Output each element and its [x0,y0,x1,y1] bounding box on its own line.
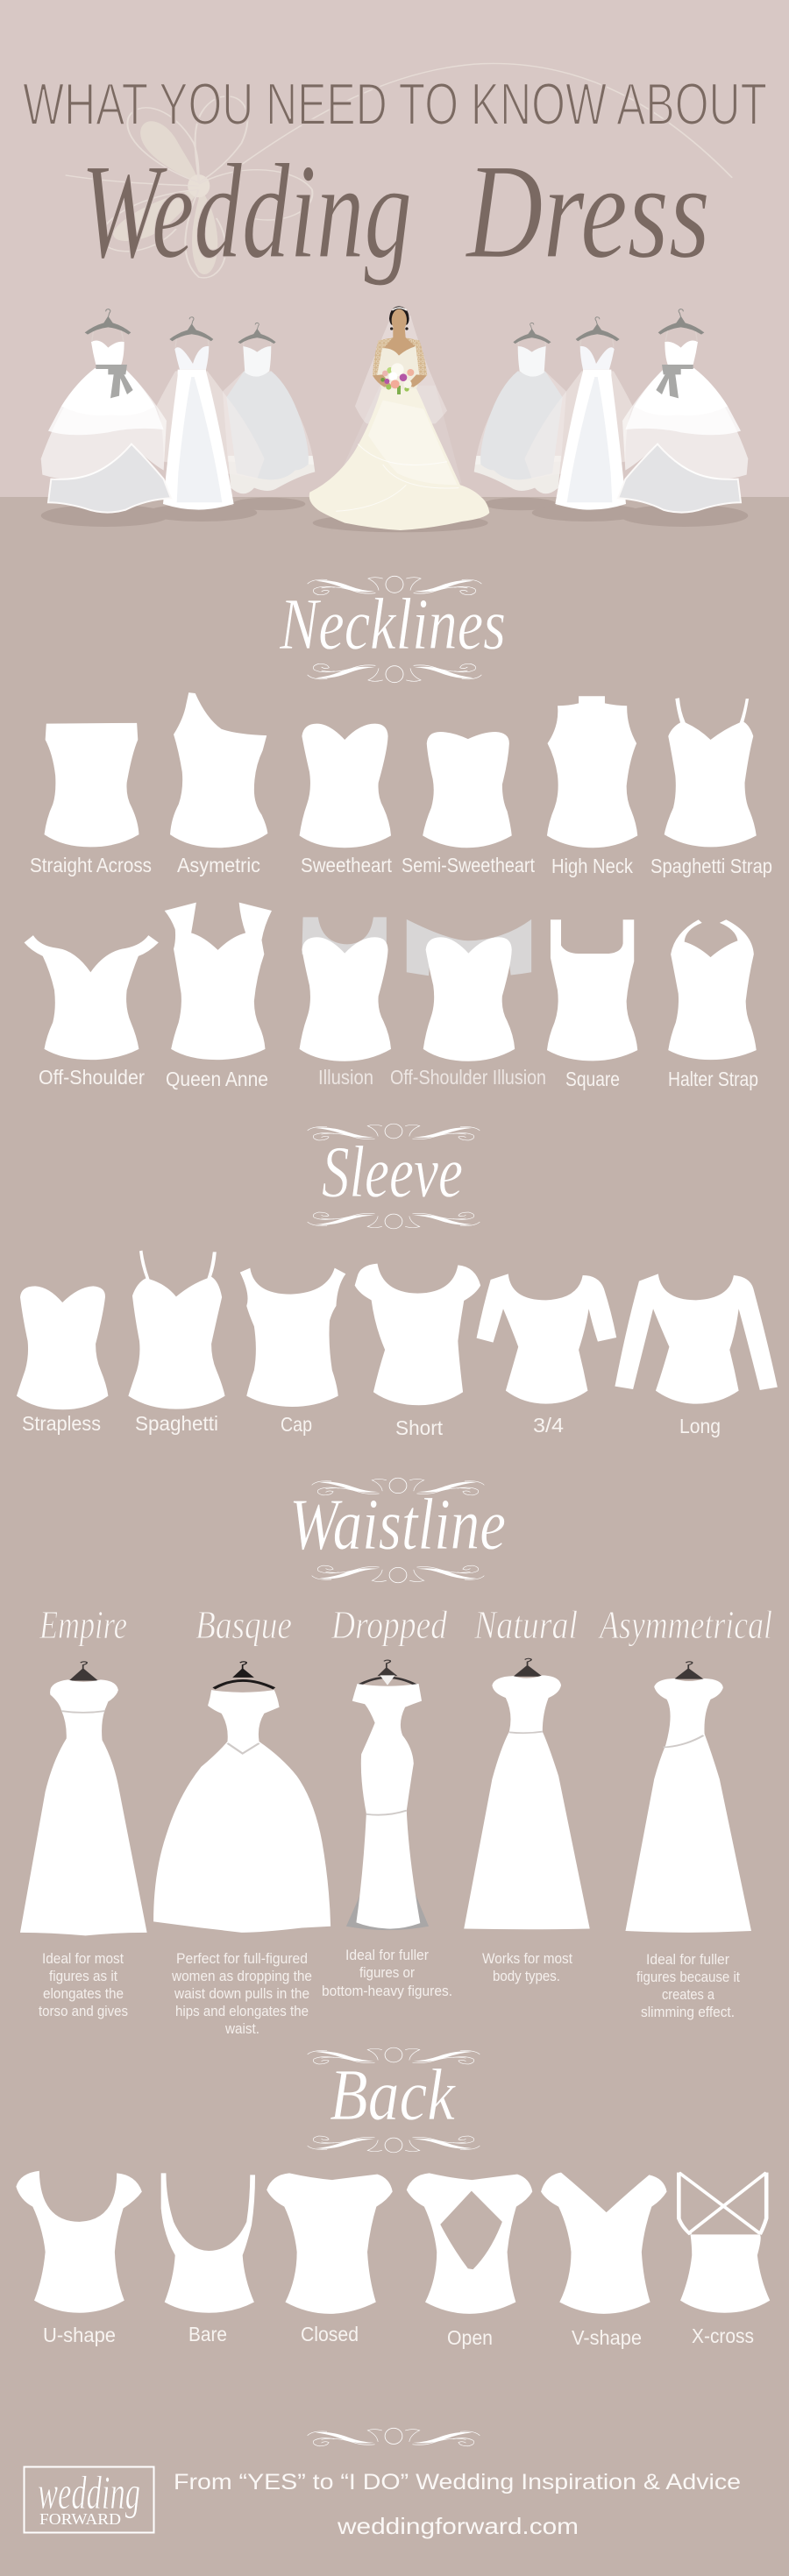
dress: asymmetrical [625,1662,751,1933]
ornament [312,1565,484,1583]
waistline sub-headings: Dropped [331,1602,448,1647]
back labels: V-shape [572,2326,642,2349]
garment: long [615,1274,778,1404]
neckline labels: Off-Shoulder Illusion [390,1066,546,1089]
sleeve labels: Strapless [22,1412,101,1435]
garment: closed [267,2173,393,2314]
forearms [373,374,427,387]
dresses on hangers, right [474,309,748,527]
sleeve labels: 3/4 [533,1414,564,1437]
garment: off-shoulder illusion [407,919,531,1061]
neckline labels: Sweetheart [301,854,393,876]
logo: wedding forward: FORWARD [39,2510,121,2528]
heading: Waistline: Waistline [289,1484,506,1565]
neckline labels: Halter Strap [668,1068,758,1090]
title: Wedding Dress: Dress [465,136,710,287]
neckline labels: Square [565,1068,620,1090]
back labels: U-shape [43,2324,116,2346]
text block: natural: Works for most [482,1950,572,1967]
panel: waistline [20,1478,772,2037]
bodice [377,346,419,388]
text block: dropped: bottom-heavy figures. [322,1983,452,1999]
logo: wedding forward: wedding [38,2466,140,2519]
text block: empire: Ideal for most [42,1950,124,1967]
neckline labels: High Neck [551,855,633,877]
garment: spaghetti strap [665,698,757,847]
dress: middle [156,336,265,510]
dress: front with bow [41,330,171,513]
sleeve labels: Long [679,1415,721,1437]
neckline labels: Asymetric [177,854,260,876]
garment: off-shoulder [25,935,159,1060]
head and hair [389,306,409,331]
dress: empire [20,1662,147,1935]
garment: three quarter [477,1274,616,1404]
ornament [308,664,481,683]
lace sleeves [373,337,427,375]
neckline labels: Illusion [318,1066,373,1089]
back labels [43,2323,754,2349]
back garments [16,2171,770,2314]
text block: natural [482,1950,572,1984]
garment: square [547,919,637,1061]
text block: asymmetrical [636,1951,740,2020]
logo: wedding forward [25,2466,154,2533]
text block: basque: women as dropping the [171,1968,312,1984]
text block: basque [171,1950,312,2037]
panel: header [0,0,789,532]
text block: empire [39,1950,128,2019]
tagline: From “YES” to “I DO” Wedding Inspiration & Advice [174,2470,741,2494]
illustration: dresses and bride [41,306,748,532]
panel: footer [25,2428,741,2539]
text block: natural: body types. [493,1968,560,1984]
bride [309,306,489,532]
neck and chest [384,327,415,357]
ornament [308,1124,480,1140]
sleeve labels: Cap [281,1413,312,1436]
text block: dropped: Ideal for fuller [345,1947,429,1963]
veil [342,316,462,484]
garment: u-shape [16,2171,142,2313]
neckline labels: Spaghetti Strap [650,855,772,877]
sleeve garments [17,1251,778,1409]
text block: empire: elongates the [43,1985,124,2002]
garment: queen anne [165,903,272,1060]
dresses on hangers, left [41,309,315,527]
text block: basque: waist down pulls in the [174,1985,309,2002]
waistline sub-headings: Natural [473,1602,578,1647]
neckline labels: Queen Anne [166,1068,268,1090]
waistline sub-headings: Basque [195,1602,292,1647]
garment: spaghetti [128,1251,225,1409]
back labels: X-cross [692,2324,754,2347]
hangers [85,309,276,344]
garment: bare [161,2173,255,2313]
neckline labels [30,854,772,1090]
heading: Back: Back [330,2054,456,2136]
waistline sub-headings [39,1602,772,1647]
garment: semi-sweetheart [423,732,512,848]
text block: basque: hips and elongates the [175,2003,309,2019]
dress: natural [464,1658,590,1929]
bride shadow [313,514,488,532]
dress: dropped [346,1660,429,1930]
garment: high neck [547,696,637,848]
waistline dresses [20,1658,751,1935]
gown [309,388,489,530]
garment: straight across [45,723,139,847]
text block: basque: Perfect for full-figured [176,1950,308,1967]
dress: basque [153,1662,331,1933]
title: Wedding Dress: Wedding [81,136,412,287]
bouquet [380,363,414,394]
text block: dropped: figures or [359,1964,415,1981]
text block: asymmetrical: slimming effect. [641,2004,735,2020]
heading: Sleeve: Sleeve [322,1132,463,1213]
text block: empire: figures as it [49,1968,117,1984]
garment: v-shape [541,2173,667,2314]
text block: dropped [322,1947,452,1999]
neckline garments [25,692,757,1061]
text block: empire: torso and gives [39,2003,128,2019]
garment: illusion [300,917,391,1061]
garment: asymetric [170,692,267,848]
neckline labels: Off-Shoulder [39,1066,145,1089]
text block: asymmetrical: Ideal for fuller [646,1951,729,1968]
panel: sleeve [17,1124,778,1439]
ornament [308,2428,480,2446]
ornament [312,1478,484,1495]
garment: x-cross [679,2173,770,2313]
floor shadows [41,498,305,527]
garment: cap [240,1268,345,1407]
back labels: Bare [188,2323,227,2345]
ornament [308,2136,480,2153]
ornament [308,2047,480,2064]
header wall [0,0,789,497]
garment: open [407,2173,532,2314]
garment: halter strap [668,919,757,1060]
ornament [308,576,481,595]
neckline labels: Semi-Sweetheart [402,854,536,876]
panel: necklines [25,576,772,1090]
waistline sub-headings: Empire [39,1602,127,1647]
sleeve labels: Spaghetti [135,1412,218,1435]
panel: back [16,2047,770,2349]
text block: asymmetrical: figures because it [636,1969,740,1985]
ornament [308,1212,480,1229]
gown layers [336,401,458,511]
garment: strapless [17,1286,108,1409]
sleeve labels [22,1412,721,1439]
dress: back gray [223,339,315,493]
heading: Necklines: Necklines [279,584,506,665]
garment: short [355,1264,480,1405]
back labels: Open [447,2326,493,2349]
bow decoration [66,63,732,278]
text block: asymmetrical: creates a [662,1986,714,2003]
neckline labels: Straight Across [30,854,152,876]
website: weddingforward.com [337,2513,579,2539]
garment: sweetheart [300,724,391,848]
sleeve labels: Short [395,1416,444,1439]
back labels: Closed [301,2323,359,2345]
text block: basque: waist. [224,2020,259,2037]
